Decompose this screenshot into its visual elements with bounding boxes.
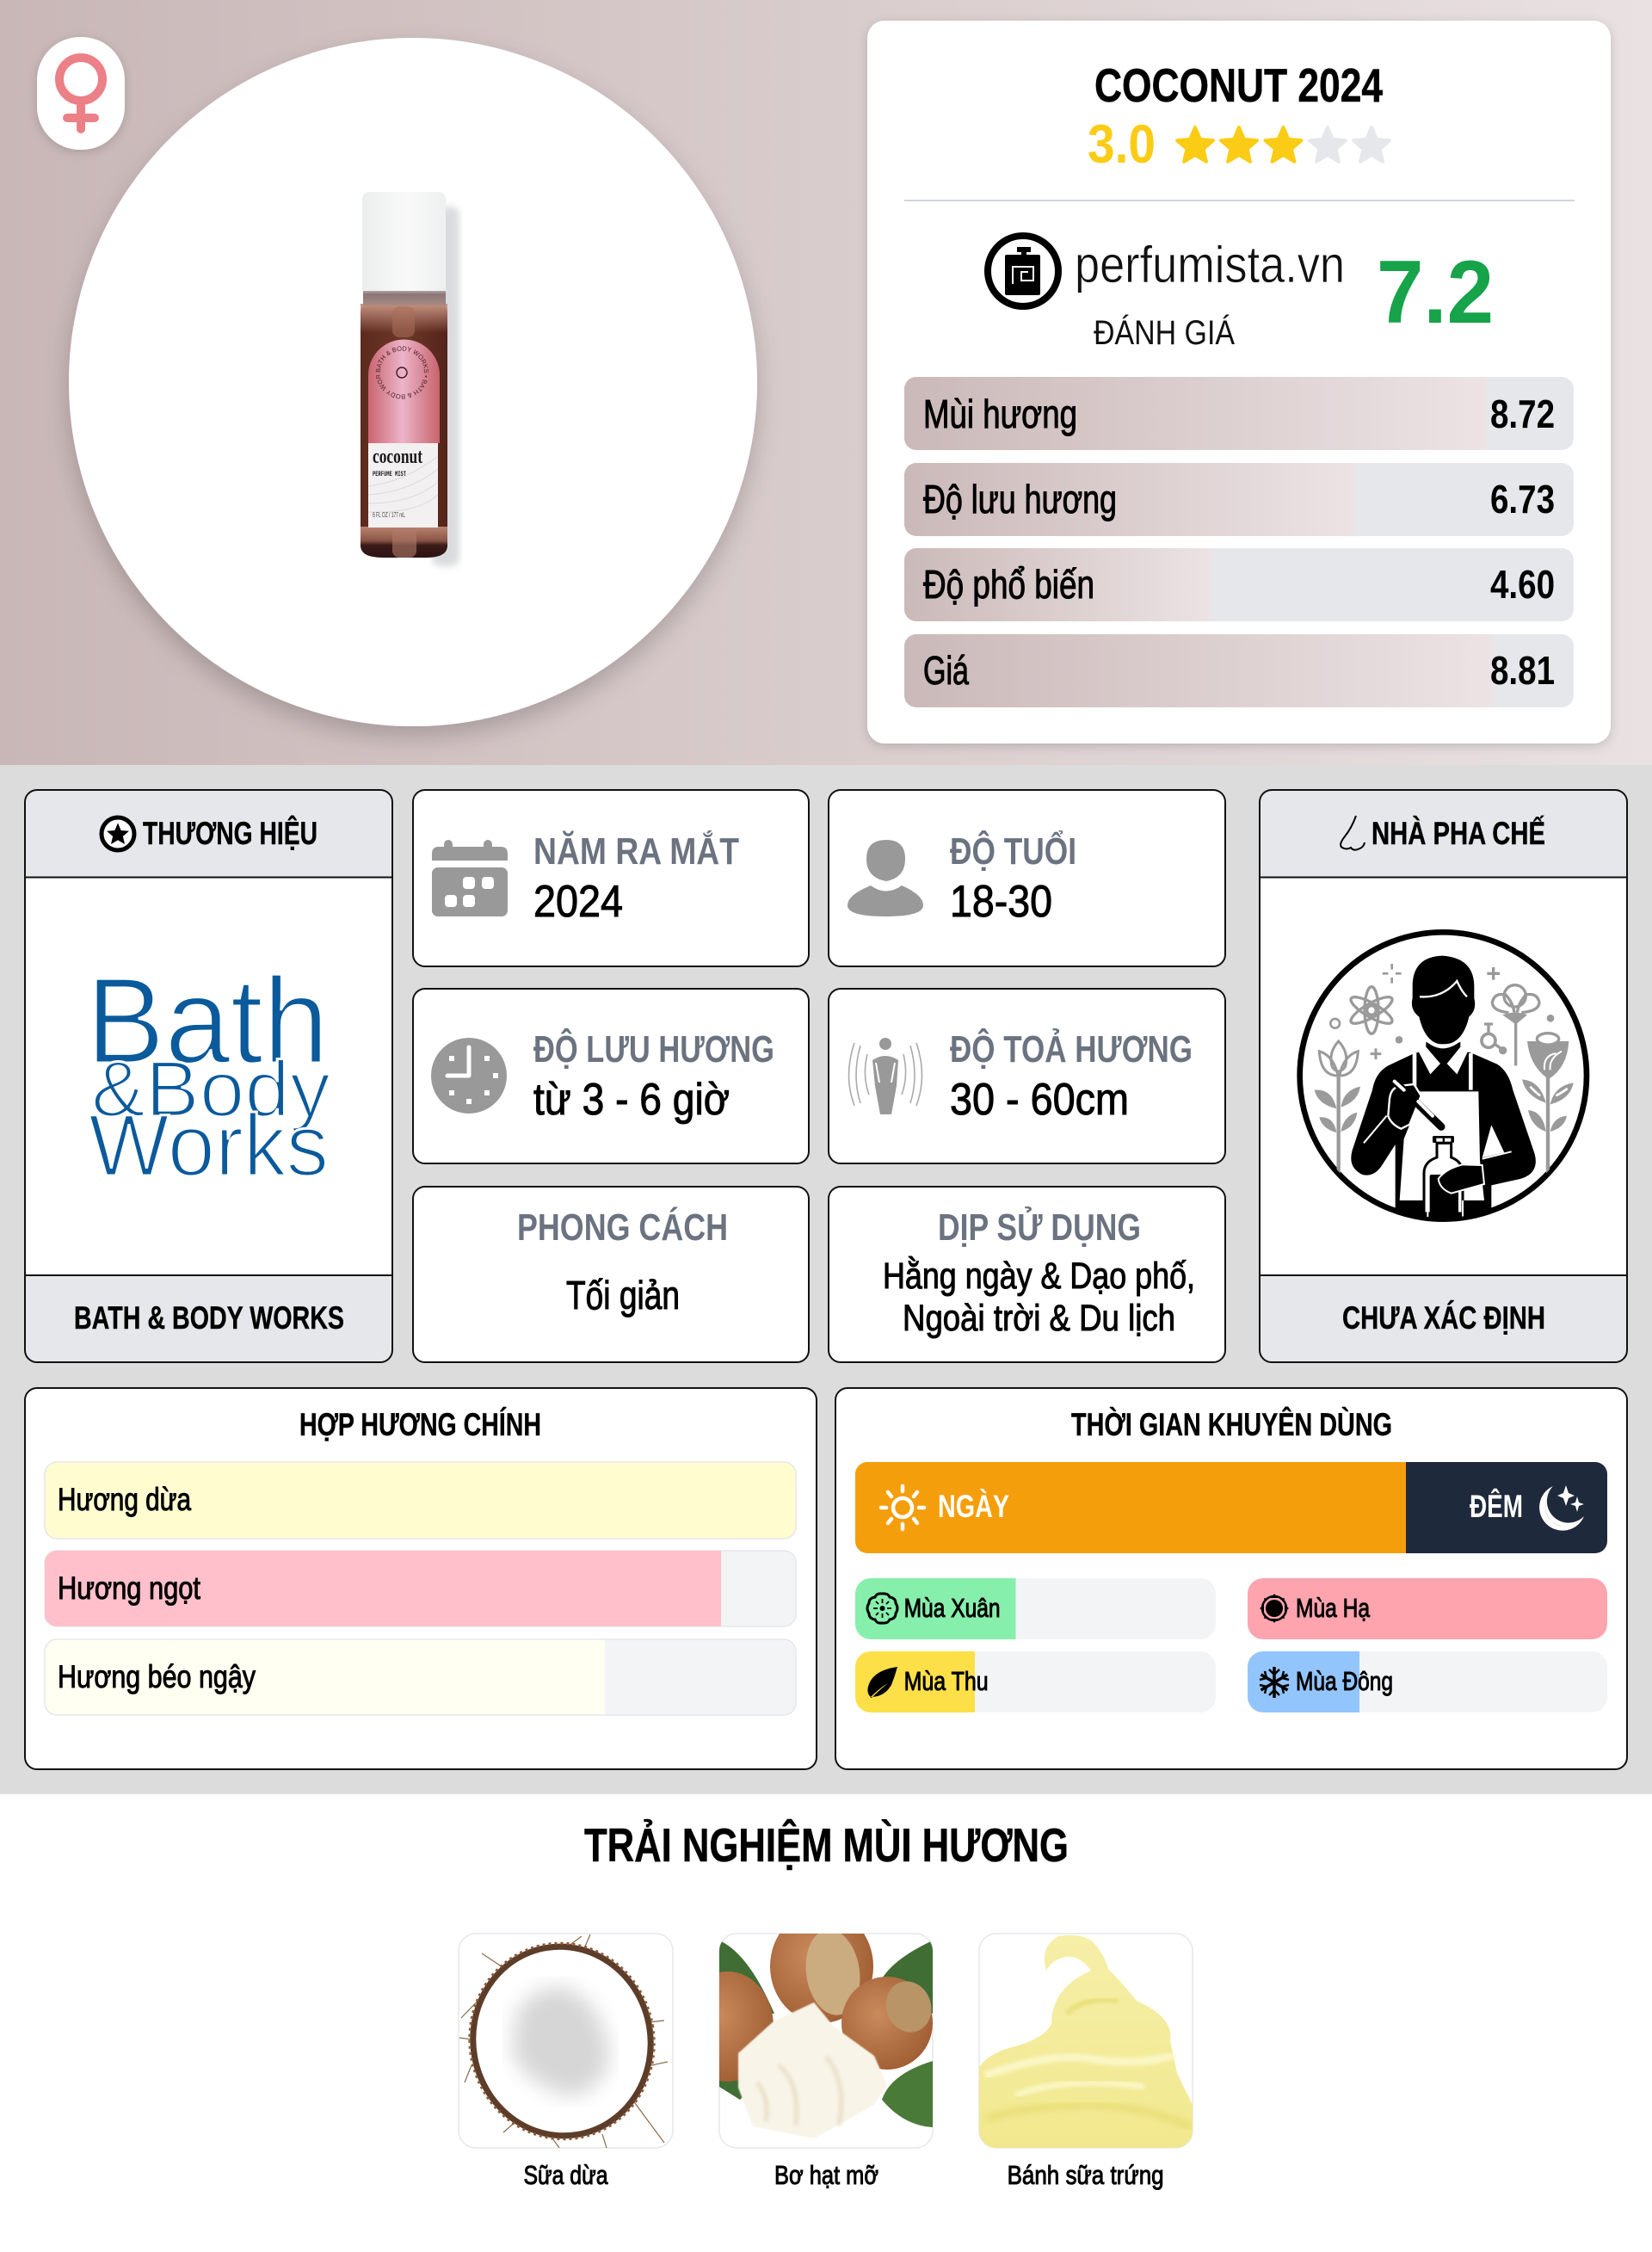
- panel: age: 18-30: [950, 877, 1052, 927]
- score bar: Độ phổ biến: 4.60: [1490, 562, 1555, 607]
- panel: projection: [829, 989, 1225, 1163]
- icon: leaf: [867, 1667, 897, 1698]
- perfumista logo: ĐÁNH GIÁ: [1094, 313, 1235, 352]
- brand logo: [86, 953, 330, 1194]
- left tulip: [1315, 1041, 1360, 1173]
- note: coconut milk: Sữa dừa: [523, 2160, 608, 2190]
- icon: moon: [1539, 1485, 1584, 1531]
- season: Mùa Đông: [1248, 1651, 1607, 1712]
- product circle: [59, 38, 767, 746]
- panel: style: PHONG CÁCH: [517, 1206, 728, 1249]
- accord bar: Hương béo ngậy: Hương béo ngậy: [58, 1659, 256, 1694]
- score bar: Mùi hương: [904, 377, 1574, 450]
- product bottle: BATH & BODY WORKS • BATH & BODY WORKS •: [375, 346, 428, 399]
- product bottle: coconut: [373, 446, 422, 468]
- icon: star badge: [102, 818, 134, 850]
- note: shea butter: Bơ hạt mỡ: [774, 2160, 878, 2190]
- brand logo: &Body: [91, 1046, 330, 1133]
- panel: occasion: Hằng ngày & Dạo phố,: [883, 1256, 1195, 1297]
- season: Mùa Hạ: [1248, 1578, 1607, 1639]
- heading: perfumer: NHÀ PHA CHẾ: [1372, 816, 1545, 851]
- product bottle: PERFUME MIST: [373, 471, 406, 478]
- panel: longevity: [413, 989, 809, 1163]
- season: Mùa Thu: [855, 1651, 1216, 1712]
- panel: release year: [413, 790, 809, 966]
- title: COCONUT 2024: [1094, 59, 1383, 112]
- panel: style: Tối giản: [566, 1273, 680, 1317]
- atom flower: [1330, 964, 1500, 1059]
- icon: nose outline: [1341, 816, 1365, 850]
- score bar: Độ phổ biến: [904, 548, 1574, 621]
- grey info section background: [0, 765, 1652, 1794]
- season: Mùa Đông: Mùa Đông: [1296, 1666, 1393, 1696]
- panel: occasion: [829, 1187, 1225, 1362]
- score bar: Giá: 8.81: [1490, 648, 1555, 693]
- accord bar: Hương ngọt: [45, 1551, 796, 1626]
- accord bar: Hương dừa: [45, 1462, 796, 1539]
- note: shea butter: [718, 1933, 934, 2189]
- score bar: Mùi hương: Mùi hương: [923, 392, 1077, 436]
- note: custard: Bánh sữa trứng: [1008, 2160, 1164, 2190]
- accord bar: Hương ngọt: Hương ngọt: [58, 1570, 201, 1606]
- image: shea nuts: [719, 1934, 933, 2138]
- score bar: Giá: Giá: [923, 648, 969, 693]
- icon: scent radius: [848, 1038, 922, 1114]
- season: Mùa Xuân: Mùa Xuân: [904, 1593, 1001, 1623]
- panel: age: [829, 790, 1225, 966]
- product bottle: [361, 192, 462, 569]
- gender badge: female: [37, 37, 125, 150]
- panel: recommended time: [835, 1388, 1627, 1769]
- icon: snowflake: [1260, 1667, 1289, 1698]
- season: Mùa Thu: Mùa Thu: [904, 1666, 989, 1696]
- score bar: Mùi hương: 8.72: [1490, 392, 1555, 436]
- panel: release year: 2024: [533, 877, 623, 927]
- score bar: Giá: [904, 634, 1574, 707]
- icon: summer sun: [1260, 1594, 1289, 1623]
- perfumista logo: [988, 236, 1345, 352]
- panel: release year: NĂM RA MẮT: [533, 830, 739, 873]
- star rating: 3.0: [1088, 114, 1156, 175]
- icon: clock: [431, 1038, 507, 1114]
- icon: calendar: [432, 840, 508, 916]
- panel: occasion: Ngoài trời & Du lịch: [903, 1298, 1175, 1339]
- icon: spring flower: [867, 1594, 897, 1623]
- brand logo: Bath: [86, 953, 329, 1089]
- rose: [1522, 1033, 1574, 1173]
- note: coconut milk: [454, 1928, 673, 2190]
- season: Mùa Xuân: [855, 1578, 1216, 1639]
- panel: age: ĐỘ TUỔI: [950, 829, 1076, 873]
- icon: sun: [881, 1486, 924, 1529]
- panel: projection: 30 - 60cm: [950, 1075, 1129, 1125]
- day night bar: [855, 1462, 1607, 1553]
- panel: projection: ĐỘ TOẢ HƯƠNG: [950, 1027, 1193, 1070]
- perfumer illustration: [1300, 932, 1587, 1225]
- product bottle: 6 FL OZ / 177 mL: [373, 511, 405, 519]
- panel: brand: [25, 790, 392, 1362]
- panel: longevity: từ 3 - 6 giờ: [533, 1075, 730, 1125]
- perfumer name: CHƯA XÁC ĐỊNH: [1342, 1300, 1545, 1336]
- panel: main accords: HỢP HƯƠNG CHÍNH: [299, 1407, 541, 1442]
- figure: [1351, 956, 1536, 1225]
- heading: brand: THƯƠNG HIỆU: [143, 815, 317, 851]
- accord bar: Hương béo ngậy: [45, 1639, 796, 1715]
- score bar: Độ lưu hương: [904, 463, 1574, 536]
- star rating: [1088, 114, 1390, 175]
- hero background: [0, 0, 1652, 765]
- score bar: Độ phổ biến: Độ phổ biến: [923, 562, 1094, 607]
- day night bar: NGÀY: [938, 1489, 1009, 1524]
- score bar: Độ lưu hương: Độ lưu hương: [923, 477, 1117, 521]
- panel: longevity: ĐỘ LƯU HƯƠNG: [533, 1027, 774, 1070]
- cotton flower: [1482, 985, 1539, 1065]
- image: coconut: [454, 1928, 669, 2154]
- perfumista logo: perfumista.vn: [1075, 236, 1345, 293]
- brand name: BATH & BODY WORKS: [74, 1300, 344, 1336]
- day night bar: ĐÊM: [1470, 1488, 1523, 1524]
- panel: main accords: [25, 1388, 817, 1769]
- panel: perfumer: [1260, 790, 1627, 1362]
- overall score: 7.2: [1377, 243, 1494, 342]
- heading: scent experience: TRẢI NGHIỆM MÙI HƯƠNG: [584, 1818, 1069, 1872]
- panel: occasion: DỊP SỬ DỤNG: [938, 1205, 1141, 1249]
- icon: person: [848, 840, 923, 916]
- note: custard: [979, 1934, 1193, 2190]
- panel: style: [413, 1187, 809, 1362]
- panel: score card: [867, 21, 1611, 743]
- score bar: Độ lưu hương: 6.73: [1490, 477, 1555, 521]
- image: custard swirl: [979, 1935, 1193, 2148]
- season: Mùa Hạ: Mùa Hạ: [1296, 1593, 1371, 1623]
- accord bar: Hương dừa: Hương dừa: [58, 1482, 191, 1517]
- panel: recommended time: THỜI GIAN KHUYÊN DÙNG: [1071, 1406, 1392, 1442]
- brand logo: Works: [89, 1096, 329, 1194]
